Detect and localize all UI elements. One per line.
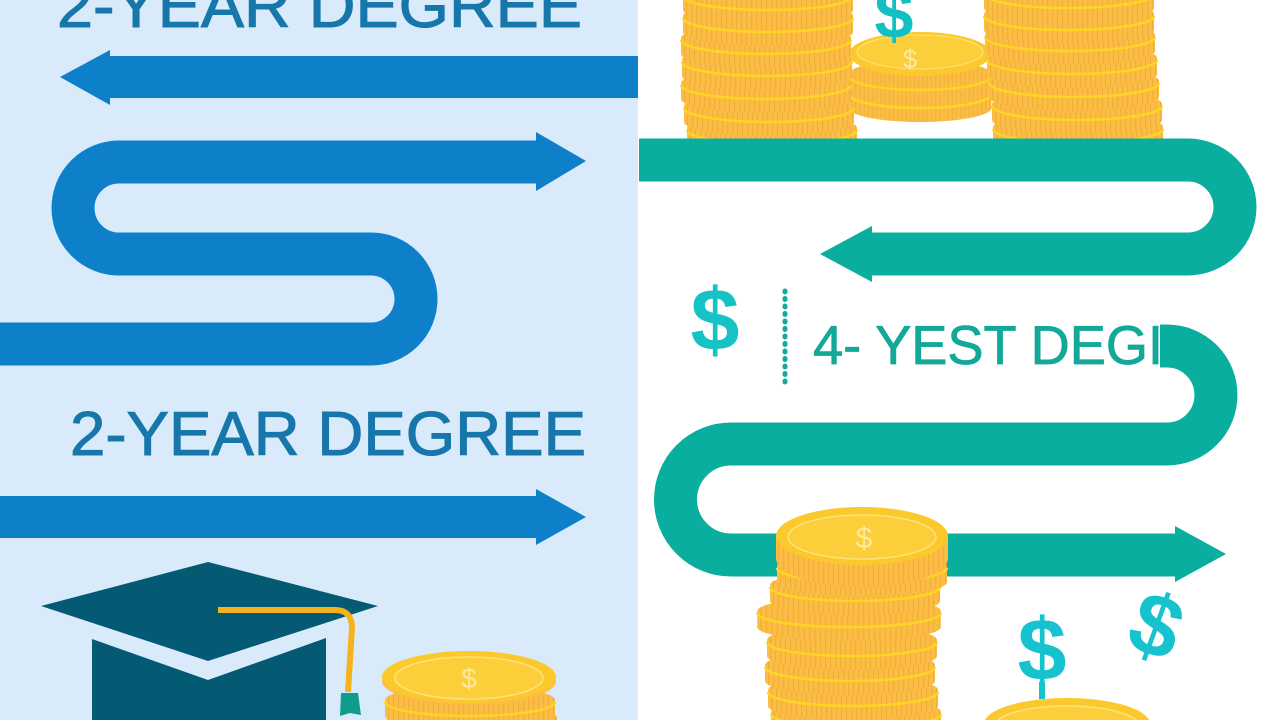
dotted divider	[782, 291, 788, 385]
top coin	[382, 657, 556, 705]
coin symbol: $	[856, 522, 873, 555]
cap board	[41, 562, 378, 661]
icon: dollar sign left: $	[691, 270, 739, 369]
top coin	[776, 508, 948, 587]
dollar stem	[1039, 682, 1045, 699]
heading: 2-year degree: 2-YEAR DEGREE	[70, 400, 586, 469]
arrow: teal winding path bottom	[676, 346, 1226, 582]
icon: coin bottom right	[984, 698, 1150, 720]
tassel cord	[218, 610, 352, 692]
icon: dollar sign bottom: $	[1018, 600, 1066, 699]
icon: graduation cap	[41, 562, 378, 720]
icon: tilted dollar sign: $	[1117, 570, 1196, 680]
cap base	[92, 638, 326, 720]
icon: right coin stack top	[984, 0, 1163, 157]
tassel end	[340, 693, 361, 716]
coin symbol: $	[461, 663, 477, 694]
icon: small center coin stack top	[849, 32, 991, 122]
arrow: top blue pointing left	[60, 50, 638, 105]
arrow: bottom blue pointing right	[0, 489, 586, 545]
top coin	[849, 32, 991, 76]
icon: tall coin stack bottom center	[757, 507, 948, 720]
arrow: winding blue path	[0, 132, 586, 344]
panel: 2-year degree background	[0, 0, 638, 720]
heading: 4-year degree garbled: 4- YEST DEGI	[813, 314, 1163, 376]
panel: 4-year degree background	[638, 0, 1280, 720]
icon: left coin stack top	[681, 0, 857, 158]
coin symbol: $	[903, 44, 918, 74]
arrow: teal winding path top	[639, 160, 1235, 282]
icon: coin stack bottom left	[382, 651, 557, 720]
